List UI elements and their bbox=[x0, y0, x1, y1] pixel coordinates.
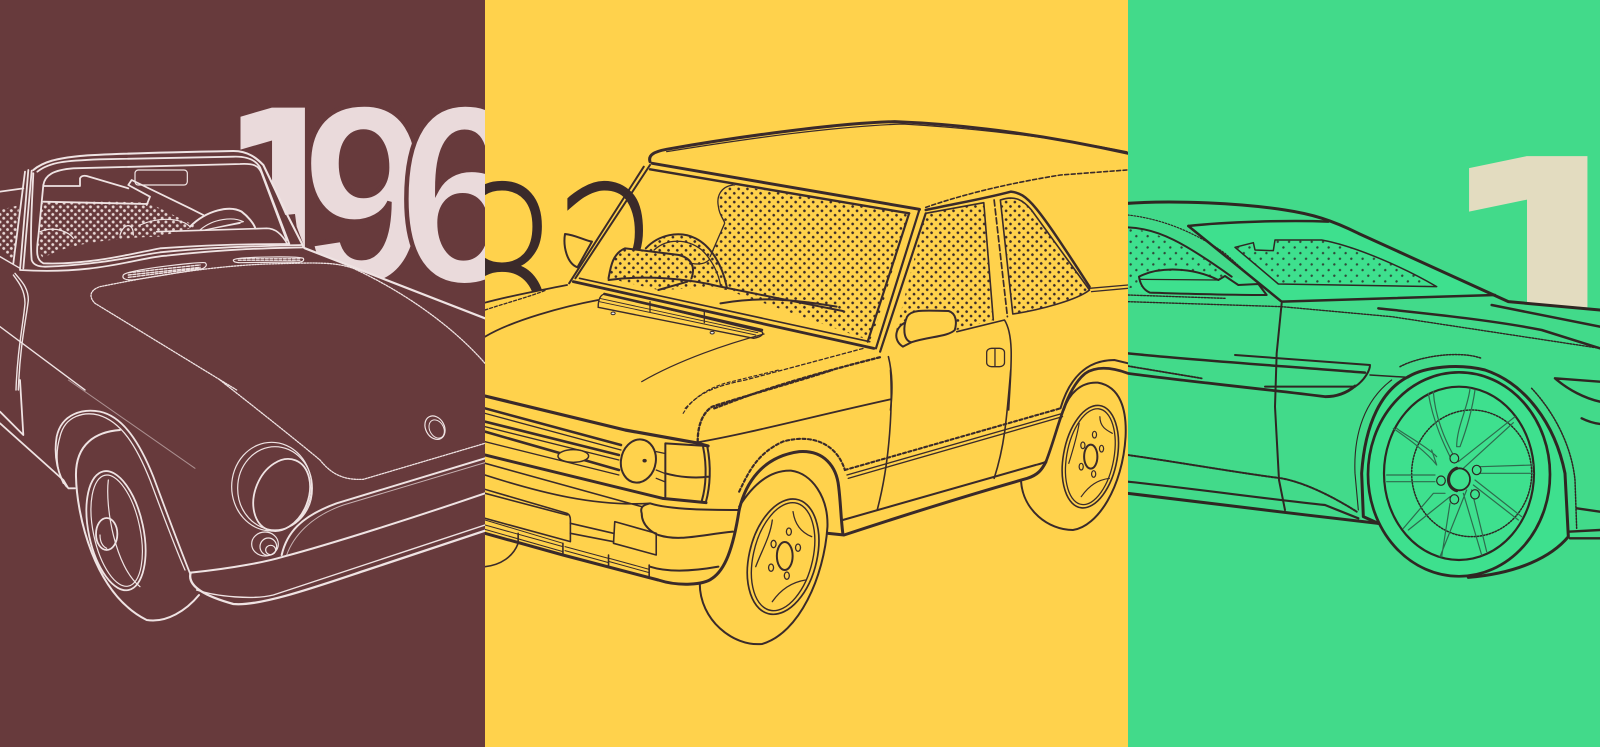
car illustration: hatchback cabin and hood bbox=[485, 122, 1128, 410]
year number 196: 9 bbox=[301, 52, 429, 338]
year number 196: 6 bbox=[398, 52, 526, 338]
year number 196 bbox=[240, 106, 485, 283]
car illustration: hatchback front and wheels bbox=[485, 360, 1128, 644]
panel: modern sports car bbox=[1128, 0, 1600, 747]
year number 82: 2 bbox=[553, 136, 667, 416]
year number 196: 1 bbox=[220, 56, 348, 356]
year number 82: 8 bbox=[441, 137, 563, 416]
panel: 1960s roadster bbox=[0, 106, 485, 622]
car illustration: roadster upper body bbox=[0, 151, 500, 390]
car illustration: roadster front and wheel bbox=[0, 380, 485, 621]
year number 82 bbox=[485, 180, 643, 292]
car illustration: sports car bbox=[1128, 202, 1600, 577]
panel: 1980s hatchback bbox=[441, 0, 1128, 747]
icon: sports car wheel bbox=[1368, 372, 1550, 576]
